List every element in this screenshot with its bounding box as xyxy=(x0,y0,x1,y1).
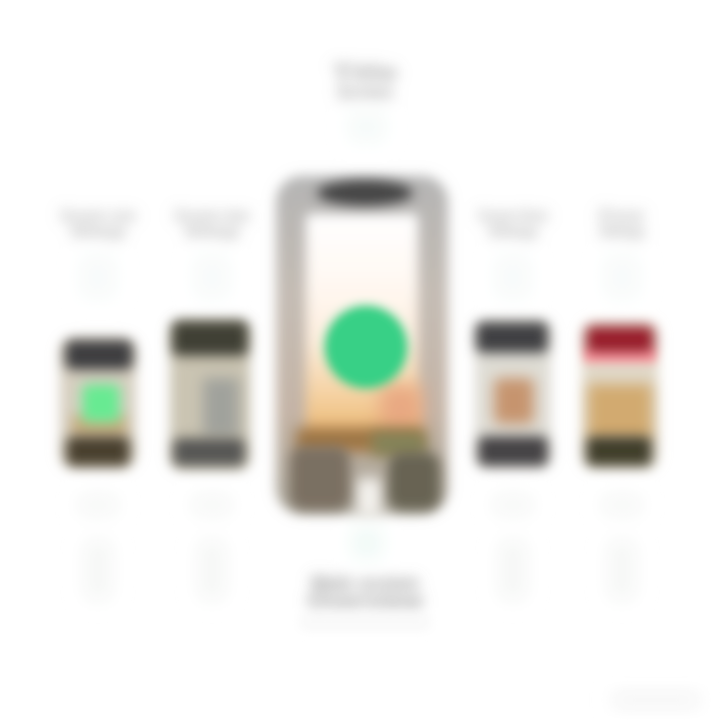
heading: top title xyxy=(332,60,398,104)
centre phone frame xyxy=(276,176,448,514)
label: phone 2 heading: Screen two xyxy=(174,206,250,225)
text block: bottom caption: Overview xyxy=(307,590,424,613)
label: phone 1 heading xyxy=(60,206,136,241)
text block: bottom caption: Main screen xyxy=(311,572,419,595)
phone 1 green button xyxy=(82,384,120,422)
phone 1 tan lower area xyxy=(72,415,126,437)
centre phone screen xyxy=(306,214,418,446)
phone 4: red header screen xyxy=(582,322,658,468)
heading: top title: Screen xyxy=(337,82,393,104)
phone 1: green screen xyxy=(60,338,136,468)
phone 2 top bar xyxy=(172,321,248,356)
centre phone bottom left block xyxy=(290,446,350,510)
centre phone notch xyxy=(317,180,413,206)
text block: bottom sub caption xyxy=(300,618,430,628)
phone 4 tan panel xyxy=(588,384,652,440)
phone 3 bottom bar xyxy=(478,436,548,466)
centre phone bottom right block xyxy=(388,452,440,510)
centre phone bottom gap xyxy=(356,478,382,518)
phone 3 body xyxy=(475,320,551,468)
phone 1 bottom bar xyxy=(66,436,130,466)
icon: green circle xyxy=(324,305,408,389)
label: phone 3 heading xyxy=(478,206,548,241)
phone 2: grey map screen xyxy=(170,320,250,470)
centre phone right band tint xyxy=(372,432,426,456)
text block: top connector note xyxy=(348,112,386,142)
infographic: all content xyxy=(60,60,700,708)
phone 4 body xyxy=(582,322,658,468)
label: phone 4 heading: Step xyxy=(599,222,645,241)
phone 3: light product screen xyxy=(475,320,551,468)
label: phone 4 heading xyxy=(599,206,645,241)
phone 2 centre panel xyxy=(203,378,239,436)
watermark xyxy=(612,692,700,708)
phone 4 bottom bar xyxy=(586,436,652,466)
phone 2 bottom bar xyxy=(173,438,245,466)
label: phone 4 heading: Four xyxy=(599,206,645,225)
label: phone 1 heading: Screen one xyxy=(60,206,136,225)
connectors: faint notes above small phones xyxy=(80,255,640,299)
phone 3 product image xyxy=(494,378,534,424)
phone 4 top bar xyxy=(586,326,654,353)
label: phone 1 heading: Step xyxy=(70,222,126,241)
phone: large centre phone xyxy=(276,176,448,518)
label: phone 2 heading: Step xyxy=(184,222,240,241)
label: phone 2 heading xyxy=(174,206,250,241)
phone 1 body xyxy=(60,338,136,468)
centre phone brown band xyxy=(296,428,424,452)
phone 2 body xyxy=(170,320,250,470)
centre phone peach accent xyxy=(380,385,422,431)
phone 1 top bar xyxy=(65,340,133,370)
label: phone 3 heading: Screen three xyxy=(478,206,548,225)
phone 3 top bar xyxy=(476,322,548,353)
text block: bottom caption xyxy=(307,572,424,613)
connector: below centre phone xyxy=(352,528,382,558)
text blocks: faint captions under small phones xyxy=(78,495,642,600)
label: phone 3 heading: Step xyxy=(488,222,538,241)
phone 4 pink band xyxy=(584,347,656,363)
heading: top title: Title xyxy=(332,60,398,85)
